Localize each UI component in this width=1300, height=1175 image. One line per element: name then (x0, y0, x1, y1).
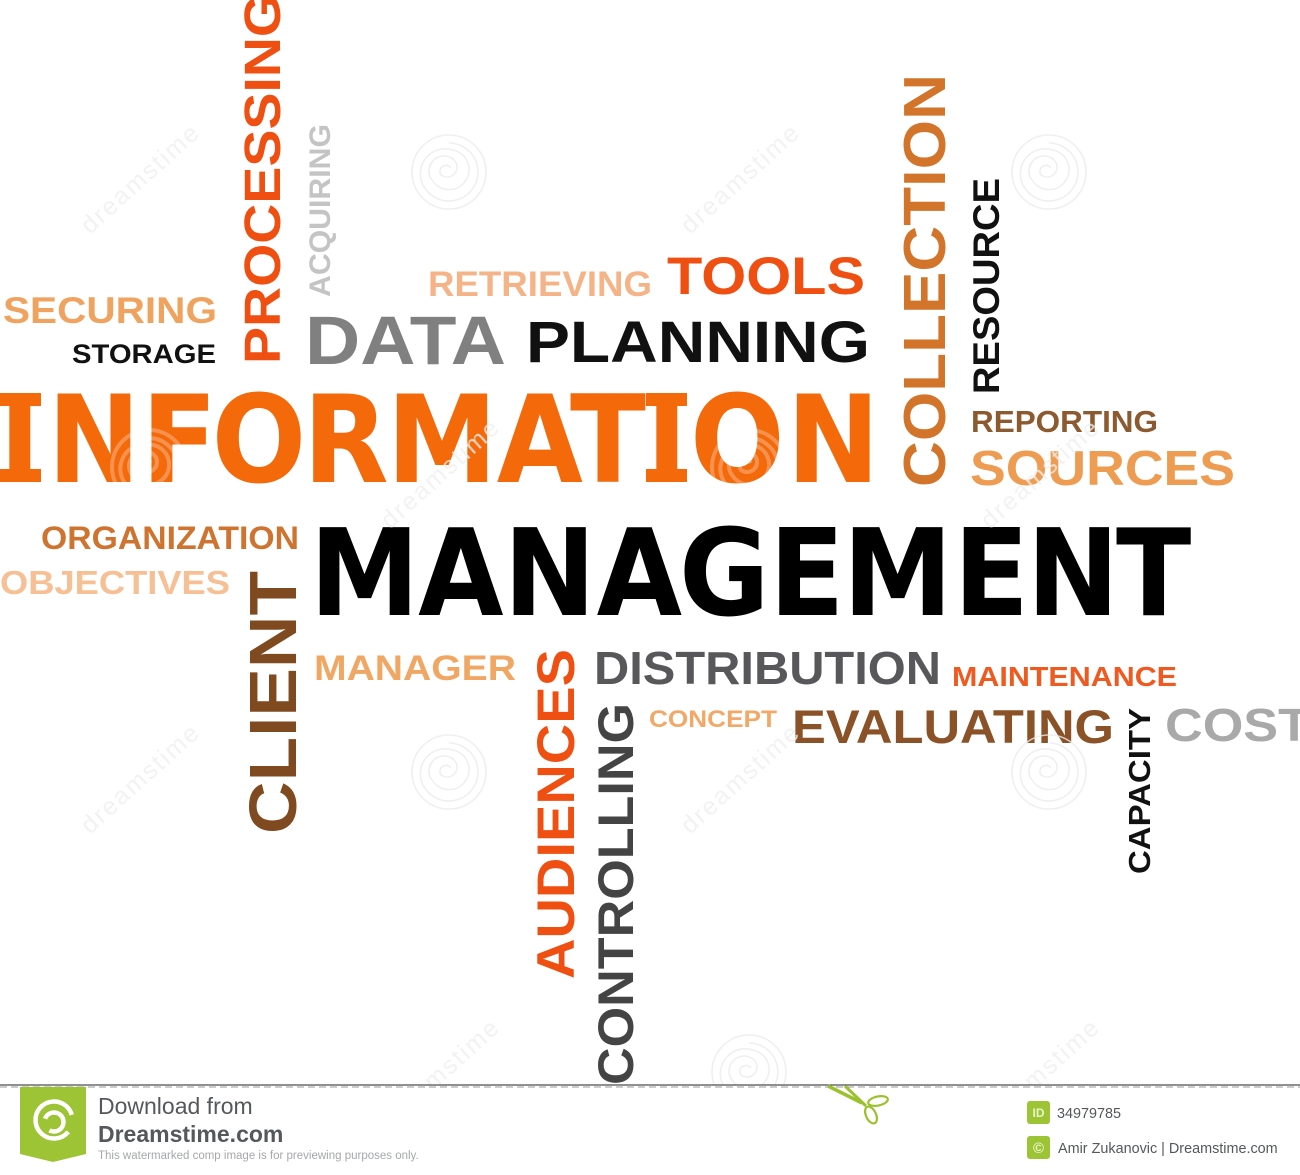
word: manager: MANAGER (314, 649, 516, 688)
icon: copyright badge (1027, 1136, 1050, 1159)
word: concept: CONCEPT (649, 706, 777, 733)
icon: copyright badge: © (1033, 1140, 1044, 1157)
word: collection: COLLECTION (892, 74, 958, 487)
word: objectives: OBJECTIVES (0, 564, 230, 601)
watermark pattern: dreamstime (75, 118, 206, 239)
word: client: CLIENT (236, 571, 311, 834)
word: capacity: CAPACITY (1122, 708, 1157, 874)
word: storage: STORAGE (72, 339, 216, 369)
word: acquiring: ACQUIRING (304, 124, 337, 297)
word: evaluating: EVALUATING (792, 700, 1114, 753)
text: image id: 34979785 (1057, 1106, 1121, 1122)
word: securing: SECURING (3, 290, 217, 331)
heading: management: MANAGEMENT (310, 505, 1192, 644)
word: tools: TOOLS (667, 247, 865, 306)
word: retrieving: RETRIEVING (428, 265, 652, 304)
word: controlling: CONTROLLING (588, 703, 644, 1085)
watermark pattern: dreamstime (75, 718, 206, 839)
word: resource: RESOURCE (966, 178, 1007, 394)
watermark pattern: dreamstime (975, 1013, 1106, 1134)
word: organization: ORGANIZATION (41, 520, 299, 556)
word: distribution: DISTRIBUTION (594, 642, 941, 694)
watermark pattern (75, 118, 1106, 1134)
icon: id badge: ID (1032, 1106, 1045, 1120)
word: cost: COST (1165, 699, 1300, 751)
word: maintenance: MAINTENANCE (952, 661, 1177, 692)
watermark pattern: dreamstime (675, 118, 806, 239)
text: download from: Download from (98, 1093, 253, 1119)
footer: white band (0, 1085, 1300, 1175)
word: sources: SOURCES (970, 442, 1235, 496)
cut line (0, 1085, 1300, 1087)
heading: information: INFORMATION (0, 371, 880, 511)
word: planning: PLANNING (526, 310, 870, 375)
word: audiences: AUDIENCES (527, 649, 586, 979)
text: watermark disclaimer: This watermarked comp image is for previewing purposes only. (98, 1150, 419, 1162)
watermark pattern: dreamstime (675, 718, 806, 839)
word: reporting: REPORTING (971, 404, 1158, 439)
watermark pattern: dreamstime (975, 413, 1106, 534)
word: processing: PROCESSING (234, 0, 291, 364)
word: data: DATA (305, 302, 506, 379)
text: dreamstime.com: Dreamstime.com (98, 1121, 283, 1147)
text: author credit: Amir Zukanovic | Dreamstime.com (1058, 1141, 1278, 1157)
icon: scissors (828, 1086, 889, 1125)
watermark pattern: dreamstime (375, 413, 506, 534)
icon: id badge (1027, 1101, 1050, 1124)
watermark pattern: dreamstime (375, 1013, 506, 1134)
icon: dreamstime ribbon (20, 1087, 86, 1162)
